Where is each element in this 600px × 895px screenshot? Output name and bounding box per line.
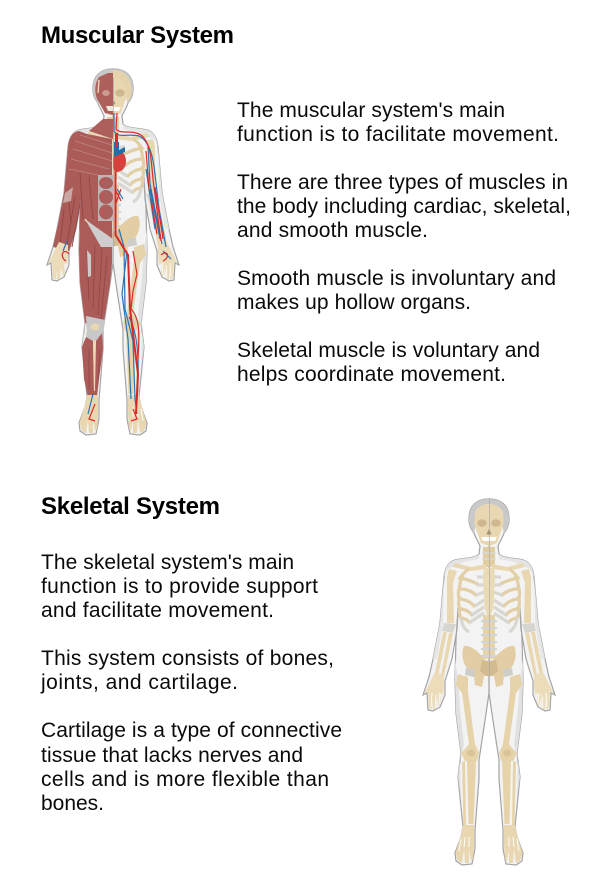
text block: skeletal system description: This system consists of bones,	[41, 647, 334, 670]
text block: muscular system description: Smooth muscle is involuntary and	[237, 267, 556, 290]
figure: skeleton	[423, 499, 555, 865]
text block: skeletal system description: function is to provide support	[41, 575, 318, 598]
text block: muscular system description: makes up hollow organs.	[237, 291, 471, 314]
text block: muscular system description	[237, 99, 571, 386]
text block: muscular system description: helps coordinate movement.	[237, 363, 506, 386]
vessels	[62, 113, 171, 421]
text block: muscular system description: Skeletal muscle is voluntary and	[237, 339, 540, 362]
text block: skeletal system description: The skeletal system's main	[41, 551, 294, 574]
text block: skeletal system description	[40, 551, 342, 815]
abdominal panel	[98, 175, 113, 221]
text block: muscular system description: function is to facilitate movement.	[237, 123, 559, 146]
title: Muscular System: Muscular System	[41, 22, 234, 49]
text block: muscular system description: There are three types of muscles in	[237, 171, 568, 194]
hand and foot bones	[48, 242, 68, 280]
text block: muscular system description: The muscular system's main	[237, 99, 505, 122]
figure: muscular and circulatory body	[47, 69, 179, 435]
left half: muscles	[48, 73, 113, 433]
lower leg muscle	[82, 333, 103, 397]
text block: skeletal system description: and facilitate movement.	[41, 599, 274, 622]
text block: skeletal system description: Cartilage is a type of connective	[41, 719, 342, 742]
head cap: skull side	[113, 70, 132, 103]
text block: muscular system description: and smooth muscle.	[237, 219, 428, 242]
text block: skeletal system description: cells and is more flexible than	[41, 768, 329, 791]
title: Skeletal System: Skeletal System	[41, 493, 220, 520]
heart	[113, 133, 126, 172]
text block: skeletal system description: bones.	[41, 792, 104, 815]
text block: skeletal system description: tissue that lacks nerves and	[41, 744, 303, 767]
knee	[84, 317, 105, 341]
text block: skeletal system description: joints, and cartilage.	[40, 671, 238, 694]
text block: muscular system description: the body including cardiac, skeletal,	[237, 195, 571, 218]
